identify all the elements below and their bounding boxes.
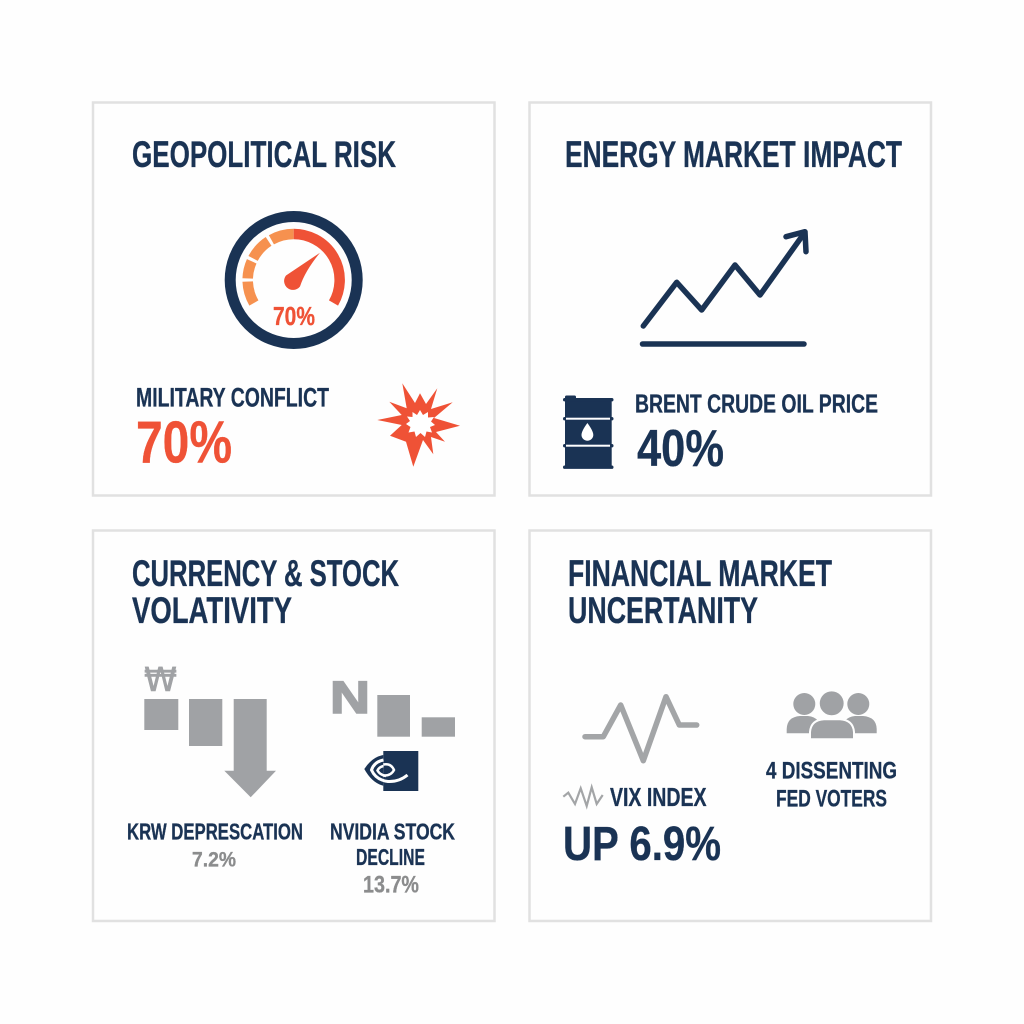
line chart with rising arrow [642,232,806,344]
gauge icon at 70%: 70% [273,301,315,331]
icon: NVIDIA logo [364,751,418,791]
panel: geopolitical risk [93,102,494,496]
label: NVIDIA stock decline [330,818,455,870]
label: 4 dissenting Fed voters: 4 DISSENTING [766,757,897,784]
gauge icon at 70% [230,216,357,344]
label: 4 dissenting Fed voters [766,757,897,813]
value: 7.2 percent: 7.2% [192,848,236,872]
label: NVIDIA stock decline: DECLINE [356,844,425,870]
panel: energy market impact [530,102,931,496]
icon: explosion [377,383,460,467]
icon: small VIX wave [563,787,603,806]
value: 13.7 percent: 13.7% [363,872,419,899]
label: brent crude oil price: BRENT CRUDE OIL PRICE [635,391,878,419]
label: 4 dissenting Fed voters: FED VOTERS [776,786,887,813]
value: up 6.9 percent: UP 6.9% [563,818,721,871]
value: 40 percent: 40% [637,420,724,478]
chart: KRW falling bars with arrow: ₩ [144,660,177,699]
value: 70 percent: 70% [136,410,232,476]
panel: currency and stock volatility [93,530,494,921]
heading: currency and stock volatility: CURRENCY & STOCK [132,553,399,594]
heading: financial market uncertainty: FINANCIAL MARKET [568,553,832,594]
chart: NVIDIA falling bars [330,672,455,737]
heading: geopolitical risk: GEOPOLITICAL RISK [132,134,396,175]
label: NVIDIA stock decline: NVIDIA STOCK [330,818,455,844]
icon: group of people [787,691,877,739]
label: military conflict: MILITARY CONFLICT [136,383,329,413]
heading: currency and stock volatility: VOLATIVITY [132,590,292,631]
heading: financial market uncertainty [568,553,832,631]
panel: financial market uncertainty [530,530,931,921]
chart: KRW falling bars with arrow [144,660,276,797]
label: VIX index: VIX INDEX [610,784,706,812]
heading: currency and stock volatility [132,553,399,631]
heading: financial market uncertainty: UNCERTANITY [568,590,758,631]
chart: NVIDIA falling bars: N [330,672,370,723]
label: KRW depreciation: KRW DEPRESCATION [127,818,303,844]
icon: volatility line [585,697,697,761]
icon: oil barrel [563,396,614,469]
